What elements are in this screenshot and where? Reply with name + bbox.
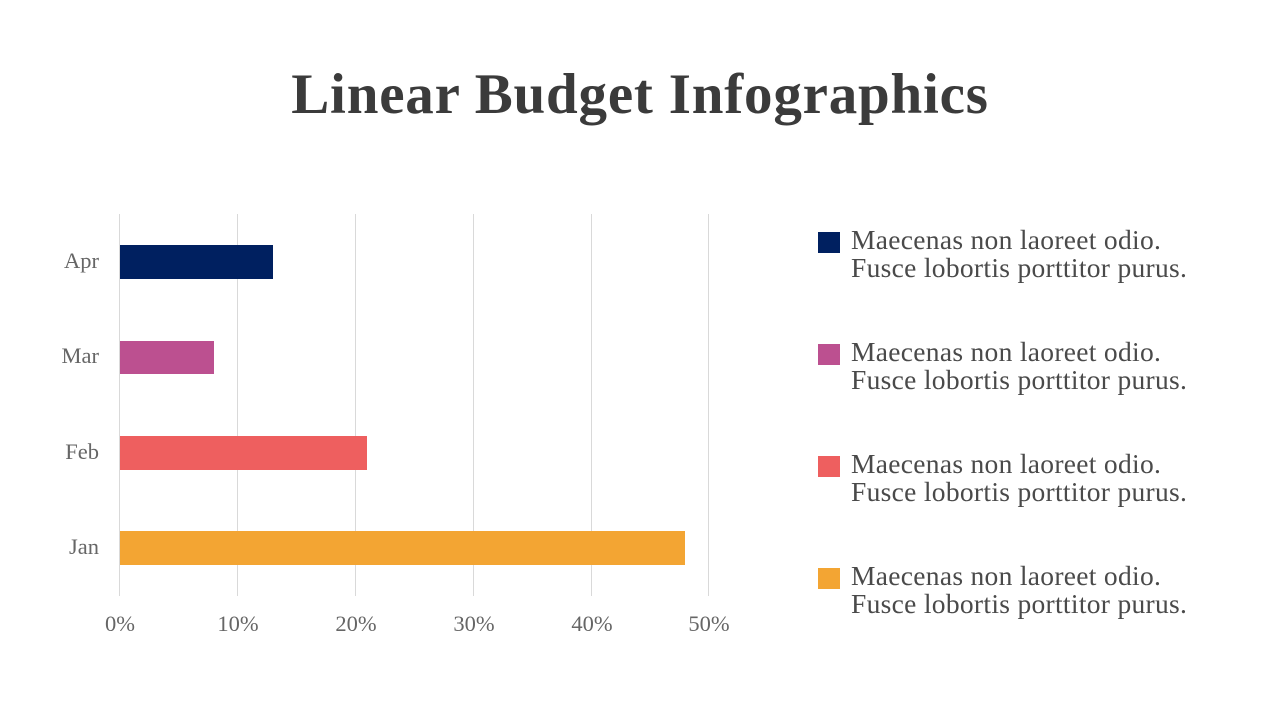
category labels: Jan xyxy=(69,534,99,559)
legend item: Feb xyxy=(818,448,1187,507)
axis labels: 40% xyxy=(571,611,613,636)
legend item: Mar: Fusce lobortis porttitor purus. xyxy=(851,364,1187,395)
legend item: Feb: Fusce lobortis porttitor purus. xyxy=(851,476,1187,507)
category labels: Feb xyxy=(65,439,99,464)
category labels xyxy=(62,248,99,559)
legend item: Apr xyxy=(818,224,1187,283)
bars xyxy=(120,245,685,565)
legend item: Mar: Maecenas non laoreet odio. xyxy=(851,336,1161,367)
legend item: Mar xyxy=(818,336,1187,395)
category labels: Mar xyxy=(62,343,99,368)
axis labels: 30% xyxy=(453,611,495,636)
axis labels xyxy=(105,611,730,636)
axis labels: 20% xyxy=(335,611,377,636)
legend item: Feb: Maecenas non laoreet odio. xyxy=(851,448,1161,479)
axis labels: 50% xyxy=(688,611,730,636)
legend item: Jan xyxy=(818,560,1187,619)
bar chart xyxy=(62,214,730,636)
legend item: Jan: Maecenas non laoreet odio. xyxy=(851,560,1161,591)
legend item: Apr: Maecenas non laoreet odio. xyxy=(851,224,1161,255)
axis labels: 10% xyxy=(217,611,259,636)
axis labels: 0% xyxy=(105,611,135,636)
legend item: Jan: Fusce lobortis porttitor purus. xyxy=(851,588,1187,619)
title: Linear Budget Infographics xyxy=(291,63,989,126)
category labels: Apr xyxy=(64,248,99,273)
legend item: Apr: Fusce lobortis porttitor purus. xyxy=(851,252,1187,283)
